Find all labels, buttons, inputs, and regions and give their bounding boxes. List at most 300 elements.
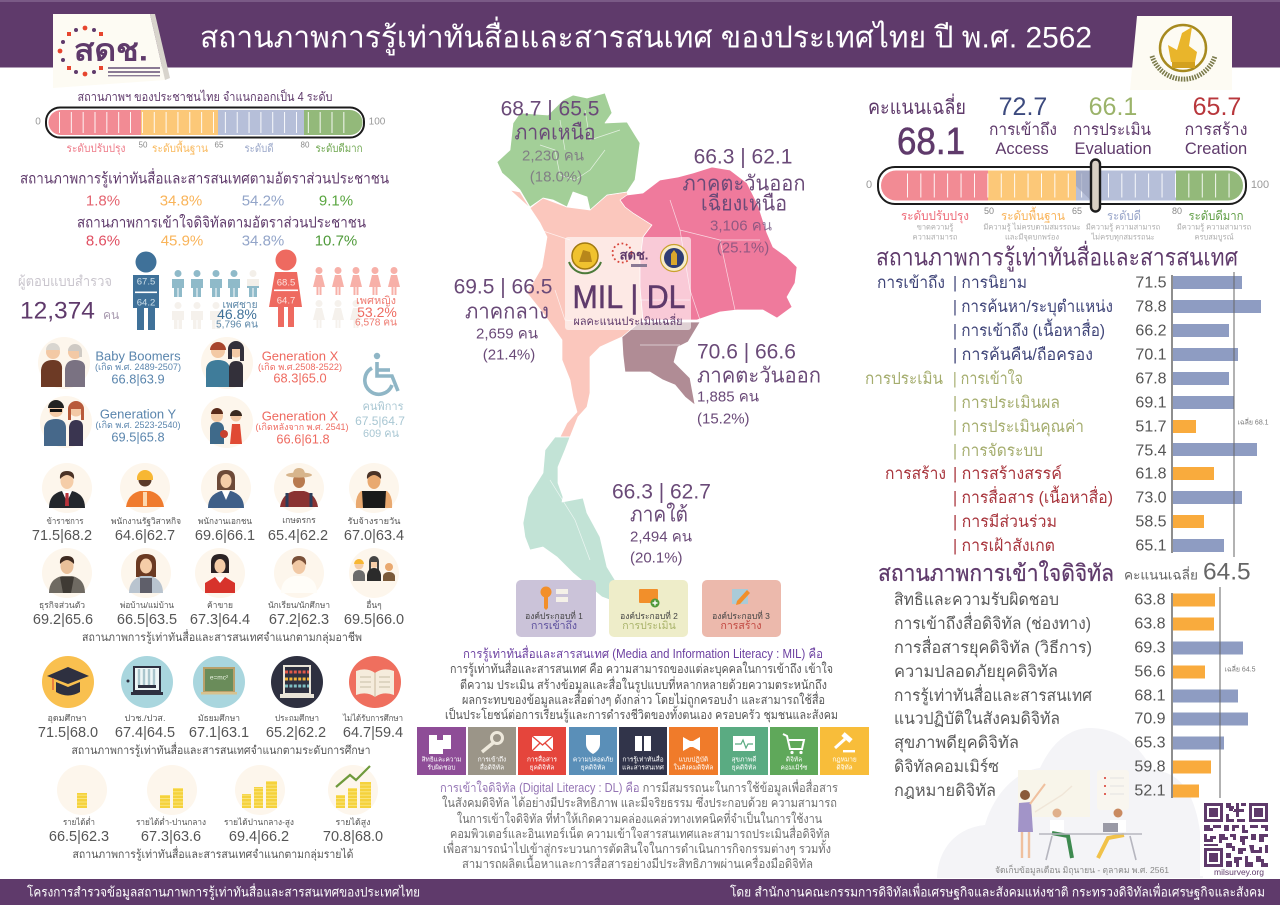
MIL definition: เป็นประโยชน์ต่อการเรียนรู้และการดำรงชีวิตของทั้งตนเอง ครอบครัว ชุมชนและสังคม <box>445 705 838 723</box>
MIL values: 71.5 <box>1135 274 1167 292</box>
occupation: state enterprise: พนักงานรัฐวิสาหกิจ <box>111 516 181 527</box>
education: primary <box>266 656 326 741</box>
panel: MIL bar chart <box>865 240 1269 557</box>
Generation text: 66.6|61.8 <box>276 432 330 446</box>
logo: ministry <box>1130 16 1232 90</box>
tile: communication: ยุคดิจิทัล <box>530 764 554 772</box>
occupation: student: นักเรียน/นักศึกษา <box>268 600 330 610</box>
panel: respondents: 12,374 <box>20 298 95 324</box>
panel: overall scale: 65 <box>1072 206 1082 216</box>
DL definition: ในสังคมดิจิทัล ได้อย่างมีประสิทธิภาพ และมีจริยธรรม ซึ่งประกอบด้วย ความสามารถ <box>442 794 837 810</box>
region label: east: (15.2%) <box>697 410 750 428</box>
education: secondary: e=mc² <box>210 674 229 682</box>
occupation: homemaker: 66.5|63.5 <box>117 612 177 628</box>
occupation caption: สถานภาพการรู้เท่าทันสื่อและสารสนเทศจำแนกตามกลุ่มอาชีพ <box>82 629 362 644</box>
panel: population shares: 54.2% <box>242 192 284 210</box>
occupation: business owner: 69.2|65.6 <box>33 612 93 628</box>
panel: overall scale <box>866 160 1269 242</box>
occupation: trader: ค้าขาย <box>207 600 233 610</box>
region label: north: 68.7 | 65.5 <box>501 98 599 120</box>
panel: overall scale: 80 <box>1172 206 1182 216</box>
panel: four level scale: 80 <box>301 140 310 150</box>
QR code <box>1200 798 1272 877</box>
scale marker <box>1091 160 1100 212</box>
scale heading: สถานภาพฯ ของประชาชนไทย จำแนกออกเป็น 4 ระดับ <box>78 89 333 104</box>
DL row labels: ดิจิทัลคอมเมิร์ซ <box>894 757 999 776</box>
occupation: homemaker: พ่อบ้าน/แม่บ้าน <box>120 600 174 610</box>
occupation: business owner: ธุรกิจส่วนตัว <box>39 600 85 611</box>
footer band <box>0 879 1280 905</box>
panel: overall scores: คะแนนเฉลี่ย <box>868 93 966 119</box>
icon: male figure <box>133 252 159 330</box>
region label: central: ภาคกลาง <box>465 300 549 324</box>
education: secondary: 67.1|63.1 <box>189 725 249 741</box>
panel: DL bar chart: คะแนนเฉลี่ย <box>1124 566 1198 582</box>
Generation X text: Generation X <box>262 348 339 364</box>
panel: overall scores <box>868 93 1248 163</box>
panel: MIL bar chart: เฉลี่ย 68.1 <box>1237 418 1269 426</box>
region label: south <box>612 480 711 566</box>
score: creation: Creation <box>1185 140 1247 158</box>
MIL values: 70.1 <box>1135 346 1167 364</box>
DL values: 65.3 <box>1134 734 1166 752</box>
Generation text <box>256 408 348 446</box>
MIL values: 73.0 <box>1135 490 1167 506</box>
card: access: องค์ประกอบที่ 1 <box>525 610 583 621</box>
panel: respondents <box>18 250 400 330</box>
region label: central: (21.4%) <box>483 346 535 364</box>
panel: overall scale: 0 <box>866 179 872 191</box>
occupation: private employee <box>195 463 255 544</box>
disabled text: คนพิการ <box>362 401 404 413</box>
occupation: trader: 67.3|64.4 <box>190 612 250 628</box>
score: evaluation: 66.1 <box>1089 93 1137 121</box>
DL bars <box>1172 587 1248 800</box>
map centre badge: MIL | DL <box>572 279 686 315</box>
map centre badge <box>565 237 691 330</box>
panel: four level scale: 65 <box>215 140 224 150</box>
occupation: homemaker <box>117 548 177 628</box>
panel: overall scale: ระดับพื้นฐาน <box>1001 206 1065 223</box>
score: access: การเข้าถึง <box>989 121 1057 139</box>
tile: communication <box>518 727 566 775</box>
region label: north-east: 3,106 คน <box>710 218 772 234</box>
occupation: trader <box>190 548 250 628</box>
income: low: 66.5|62.3 <box>49 829 109 845</box>
region label: south: 66.3 | 62.7 <box>612 480 711 504</box>
score: evaluation <box>1073 93 1152 158</box>
occupation: others <box>344 548 404 628</box>
Generation Y text: 69.5|65.8 <box>111 430 165 444</box>
score: access: Access <box>995 140 1049 158</box>
panel: income <box>49 765 383 861</box>
DL topic tiles <box>417 727 869 775</box>
panel: overall scale: ครบสมบูรณ์ <box>1194 232 1234 242</box>
icon: male figure: 64.2 <box>137 298 155 308</box>
footer left text: โครงการสำรวจข้อมูลสถานภาพการรู้เท่าทันสื่อและสารสนเทศของประเทศไทย <box>27 884 420 900</box>
education: vocational: 67.4|64.5 <box>115 725 175 741</box>
title: สถานภาพการรู้เท่าทันสื่อและสารสนเทศ ของประเทศไทย ปี พ.ศ. 2562 <box>200 16 1092 56</box>
MIL values: 75.4 <box>1135 442 1167 460</box>
region label: east: 70.6 | 66.6 <box>697 340 796 364</box>
MIL bars <box>1172 272 1261 557</box>
header band <box>0 0 1280 68</box>
panel: overall scale: ขาดความรู้ <box>917 222 953 232</box>
MIL row labels: | การประเมินคุณค่า <box>953 418 1084 437</box>
data collection note: จัดเก็บข้อมูลเดือน มิถุนายน - ตุลาคม พ.ศ. 2561 <box>995 864 1169 876</box>
icon: generation X <box>201 337 253 389</box>
DL values: 63.8 <box>1134 592 1166 608</box>
income: middle-high: 69.4|66.2 <box>229 829 289 845</box>
education: primary: ประถมศึกษา <box>275 713 319 723</box>
MIL definition <box>445 645 838 723</box>
occupation: government officer <box>32 463 92 544</box>
tile: safety <box>569 727 617 775</box>
DL values: 56.6 <box>1134 664 1166 680</box>
DL row labels: สิทธิและความรับผิดชอบ <box>894 591 1059 609</box>
Baby Boomers text: (เกิด พ.ศ. 2489-2507) <box>95 362 181 372</box>
region label: central: 2,659 คน <box>476 326 538 342</box>
MIL group labels <box>865 274 946 483</box>
education: higher <box>38 656 98 741</box>
logo: ONDE: สดช. <box>74 34 148 68</box>
DL definition: เพื่อสามารถนำไปเข้าสู่กระบวนการตัดสินใจในการดำเนินการกิจกรรมต่างๆ รวมทั้ง <box>443 839 831 857</box>
card: creation <box>702 580 781 637</box>
panel: overall scale: 50 <box>984 206 994 216</box>
score: creation: 65.7 <box>1193 93 1241 121</box>
tile: law <box>820 727 869 775</box>
region label: north-east: 66.3 | 62.1 <box>694 146 792 168</box>
card: creation: การสร้าง <box>721 620 761 632</box>
MIL chart heading: สถานภาพการรู้เท่าทันสื่อและสารสนเทศ <box>876 240 1238 272</box>
Generation Y text: Generation Y <box>100 406 177 422</box>
Baby Boomers text: 66.8|63.9 <box>111 372 165 386</box>
region label: south: (20.1%) <box>630 550 683 566</box>
education: secondary <box>189 656 249 741</box>
tile: access <box>468 727 516 775</box>
education: none: 64.7|59.4 <box>343 725 403 741</box>
education: primary: 65.2|62.2 <box>266 725 326 741</box>
map of Thailand <box>497 93 797 600</box>
income: high: รายได้สูง <box>336 817 370 828</box>
region label: north-east: ภาคตะวันออก <box>682 172 806 196</box>
MIL group labels: การสร้าง <box>885 465 946 483</box>
occupation: daily worker <box>344 463 404 544</box>
panel: population shares <box>20 168 389 250</box>
DL definition: สามารถผลิตเนื้อหาและการสื่อสารอย่างมีประสิทธิภาพผ่านเครื่องมือดิจิทัล <box>462 854 813 871</box>
tile: access: การเข้าถึง <box>478 756 506 764</box>
MIL share heading: สถานภาพการรู้เท่าทันสื่อและสารสนเทศตามอัตราส่วนประชาชน <box>20 168 389 188</box>
male ratio pictogram <box>172 270 259 329</box>
MIL definition: การรู้เท่าทันสื่อและสารสนเทศ (Media and Information Literacy : MIL) คือ <box>463 645 823 662</box>
badge logos: สดช. <box>620 248 648 262</box>
panel: population shares: 10.7% <box>315 232 357 250</box>
education: vocational: ปวช./ปวส. <box>124 713 166 723</box>
DL row labels <box>894 591 1092 800</box>
male share: 46.8% <box>217 306 257 322</box>
panel: four level scale: ระดับดีมาก <box>316 142 362 155</box>
panel: four level scale: 100 <box>369 116 386 128</box>
DL row labels: ความปลอดภัยยุคดิจิทัล <box>894 663 1058 682</box>
region: north <box>497 93 640 210</box>
MIL values: 65.1 <box>1135 538 1167 554</box>
panel: DL bar chart: เฉลี่ย 64.5 <box>1224 664 1256 674</box>
occupation: farmer: เกษตรกร <box>282 515 316 525</box>
tile: literacy: และสารสนเทศ <box>622 764 665 772</box>
DL row labels: สุขภาพดียุคดิจิทัล <box>894 734 1019 753</box>
income: low-middle: 67.3|63.6 <box>141 829 201 845</box>
map centre badge: ผลคะแนนประเมินเฉลี่ย <box>574 313 682 328</box>
region label: south: ภาคใต้ <box>630 502 688 526</box>
region: central <box>510 190 652 437</box>
DL definition: ในการเข้าใจดิจิทัล ที่ทำให้เกิดความคล่องแคล่วทางเทคนิคที่จำเป็นในการใช้งาน <box>457 810 822 826</box>
tile: rights <box>417 727 466 775</box>
panel: population shares: 8.6% <box>86 232 120 250</box>
icon: female figure: 68.5 <box>277 278 295 288</box>
Generation text: Generation X <box>262 408 339 424</box>
male share <box>216 299 258 330</box>
tile: literacy: การรู้เท่าทันสื่อ <box>622 754 664 764</box>
Generation X text <box>258 348 342 386</box>
panel: four level scale: ระดับพื้นฐาน <box>152 140 208 155</box>
MIL row labels: | การเข้าถึง (เนื้อหาสื่อ) <box>953 318 1105 340</box>
scale bar <box>46 108 364 138</box>
tile: health <box>720 727 768 775</box>
tile: etiquette <box>669 727 718 775</box>
tile: health: สุขภาพดี <box>732 756 756 764</box>
panel: overall scale: มีความรู้ ความสามารถ <box>1177 222 1251 232</box>
female share: 6,578 คน <box>355 318 397 328</box>
region label: south: 2,494 คน <box>630 528 692 546</box>
Generation text: (เกิดหลังจาก พ.ศ. 2541) <box>256 422 348 432</box>
DL row labels: แนวปฏิบัติในสังคมดิจิทัล <box>894 709 1060 728</box>
MIL group labels: การเข้าถึง <box>877 274 945 292</box>
occupation: state enterprise: 64.6|62.7 <box>115 528 175 544</box>
region label: central: 69.5 | 66.5 <box>454 276 552 298</box>
panel: four level scale: 50 <box>139 140 148 150</box>
occupation: daily worker: รับจ้างรายวัน <box>348 516 401 526</box>
Generation Y text: (เกิด พ.ศ. 2523-2540) <box>96 420 180 430</box>
occupation: government officer: ข้าราชการ <box>46 516 84 526</box>
panel: overall scores: 68.1 <box>897 121 965 163</box>
icon: baby boomers <box>38 337 90 389</box>
panel: overall scale: มีความรู้ ไม่ครบตามสมรรถนะ <box>983 222 1081 232</box>
DL definition <box>440 779 838 871</box>
income: high: 70.8|68.0 <box>323 829 383 845</box>
DL values: 70.9 <box>1134 710 1166 728</box>
occupation: private employee: 69.6|66.1 <box>195 528 255 544</box>
panel: component cards <box>516 580 781 637</box>
occupation: business owner <box>33 548 93 628</box>
income: low: รายได้ต่ำ <box>63 816 95 827</box>
panel: population shares: 45.9% <box>161 232 203 250</box>
tile: health: ยุคดิจิทัล <box>732 764 756 772</box>
region label: east: 1,885 คน <box>697 388 759 406</box>
Generation Y text <box>96 406 180 444</box>
icon: generation Y <box>40 396 92 448</box>
region label: north-east <box>682 146 806 256</box>
tile: etiquette: แบบปฏิบัติ <box>679 756 708 764</box>
panel: respondents: คน <box>103 308 119 322</box>
card: creation: องค์ประกอบที่ 3 <box>712 610 770 621</box>
occupation: others: อื่นๆ <box>366 599 382 610</box>
tile: communication: การสื่อสาร <box>527 754 558 764</box>
MIL values: 66.2 <box>1135 322 1167 340</box>
icon: wheelchair <box>365 353 398 394</box>
region label: north: (18.0%) <box>530 168 582 186</box>
panel: overall scale: ระดับดี <box>1107 209 1141 223</box>
region label: north: ภาคเหนือ <box>514 122 596 144</box>
MIL values: 51.7 <box>1135 418 1167 436</box>
occupation: student: 67.2|62.3 <box>269 612 329 628</box>
MIL values: 58.5 <box>1135 514 1167 530</box>
panel: population shares: 9.1% <box>319 192 353 210</box>
tile: law: กฎหมาย <box>832 756 857 764</box>
disabled text <box>355 401 405 440</box>
MIL row labels: | การประเมินผล <box>953 394 1060 412</box>
panel: overall scale: 100 <box>1251 179 1269 191</box>
DL share heading: สถานภาพการเข้าใจดิจิทัลตามอัตราส่วนประชาชน <box>77 214 366 232</box>
DL values: 52.1 <box>1134 782 1166 800</box>
region: east <box>622 322 700 405</box>
education: higher: อุดมศึกษา <box>48 713 86 724</box>
panel: four level scale: ระดับดี <box>244 142 274 155</box>
score: access: 72.7 <box>999 93 1047 121</box>
MIL row labels: | การสื่อสาร (เนื้อหาสื่อ) <box>953 485 1113 507</box>
MIL values: 61.8 <box>1135 466 1167 482</box>
panel: population shares: 34.8% <box>160 192 202 210</box>
icon: female figure <box>269 250 302 327</box>
income: middle-high <box>224 765 294 845</box>
panel: overall scale: มีความรู้ ความสามารถ <box>1086 222 1160 232</box>
disabled text: 67.5|64.7 <box>355 414 405 428</box>
female share: 53.2% <box>357 304 397 320</box>
tile: literacy <box>619 727 667 775</box>
MIL values: 69.1 <box>1135 394 1167 412</box>
MIL row labels: | การค้นคืน/ถือครอง <box>953 346 1093 364</box>
male share: เพศชาย <box>222 299 258 311</box>
education caption: สถานภาพการรู้เท่าทันสื่อและสารสนเทศจำแนกตามระดับการศึกษา <box>72 742 370 757</box>
MIL row labels: | การนิยาม <box>953 274 1027 292</box>
Baby Boomers text: Baby Boomers <box>95 348 181 364</box>
panel: DL bar chart: 64.5 <box>1203 558 1251 586</box>
income caption: สถานภาพการรู้เท่าทันสื่อและสารสนเทศจำแนกตามกลุ่มรายได้ <box>72 846 354 861</box>
card: access <box>516 580 596 637</box>
MIL row labels: | การสร้างสรรค์ <box>953 464 1062 483</box>
score: creation: การสร้าง <box>1184 121 1248 139</box>
panel: overall scale: ความสามารถ <box>913 232 957 242</box>
income: low-middle: รายได้ต่ำ-ปานกลาง <box>136 816 206 827</box>
score: evaluation: Evaluation <box>1074 140 1152 158</box>
region: north-east <box>620 167 797 320</box>
DL values: 68.1 <box>1134 688 1166 704</box>
region label: east <box>697 340 821 428</box>
panel: four level scale: ระดับปรับปรุง <box>66 143 126 155</box>
icon: post 2541 generation <box>201 396 253 448</box>
tile: rights: สิทธิและความ <box>422 756 461 764</box>
occupation: farmer: 65.4|62.2 <box>268 528 328 544</box>
Generation X text: 68.3|65.0 <box>273 370 327 386</box>
MIL row labels: | การจัดระบบ <box>953 442 1043 460</box>
panel: four level scale <box>35 89 386 155</box>
education: none <box>342 656 403 741</box>
tile: commerce: ดิจิทัล <box>786 756 802 764</box>
respondents count: ผู้ตอบแบบสำรวจ <box>18 273 112 290</box>
tile: law: ดิจิทัล <box>836 764 853 772</box>
education: vocational <box>115 656 175 741</box>
MIL row labels: | การเข้าใจ <box>953 369 1023 388</box>
region: south <box>523 437 615 600</box>
score: creation <box>1184 93 1248 158</box>
MIL definition: ผลกระทบของข้อมูลและสื่อต่างๆ ดังกล่าว โดยไม่ถูกครอบงำ และสามารถใช้สื่อ <box>462 691 825 708</box>
DL definition: การเข้าใจดิจิทัล (Digital Literacy : DL) คือ การมีสมรรถนะในการใช้ข้อมูลเพื่อสื่อสาร <box>440 779 838 796</box>
income: high <box>323 765 383 845</box>
logo: ONDE <box>53 14 170 88</box>
MIL definition: การรู้เท่าทันสื่อและสารสนเทศ คือ ความสามารถของแต่ละบุคคลในการเข้าถึง เข้าใจ <box>450 660 833 677</box>
panel: population shares: 34.8% <box>242 232 284 250</box>
region label: north-east: (25.1%) <box>717 240 769 256</box>
occupation: daily worker: 67.0|63.4 <box>344 528 404 544</box>
illustration: team at whiteboard <box>937 728 1203 878</box>
panel: DL bar chart <box>878 558 1256 800</box>
panel: education <box>38 656 403 757</box>
education: none: ไม่ได้รับการศึกษา <box>342 713 403 723</box>
income: low-middle <box>136 765 206 845</box>
education: higher: 71.5|68.0 <box>38 725 98 741</box>
female ratio pictogram <box>313 267 400 328</box>
region label: north <box>501 98 599 186</box>
education: secondary: มัธยมศึกษา <box>198 713 240 723</box>
female share: เพศหญิง <box>356 295 396 307</box>
MIL values: 78.8 <box>1135 298 1167 316</box>
MIL row labels: | การค้นหา/ระบุตำแหน่ง <box>953 298 1113 317</box>
panel: population shares: 1.8% <box>86 192 120 210</box>
tile: safety: ความปลอดภัย <box>573 756 613 764</box>
occupation: others: 69.5|66.0 <box>344 612 404 628</box>
card: evaluation: องค์ประกอบที่ 2 <box>620 610 678 621</box>
region label: east: ภาคตะวันออก <box>697 364 821 388</box>
DL row labels: การรู้เท่าทันสื่อและสารสนเทศ <box>894 684 1092 706</box>
card: evaluation: การประเมิน <box>622 620 676 632</box>
region label: central <box>454 276 552 364</box>
DL chart heading: สถานภาพการเข้าใจดิจิทัล <box>878 560 1114 586</box>
panel: generations <box>38 337 405 448</box>
panel: overall scale: ระดับปรับปรุง <box>901 209 969 224</box>
DL row labels: การเข้าถึงสื่อดิจิทัล (ช่องทาง) <box>894 612 1091 633</box>
tile: rights: รับผิดชอบ <box>427 764 456 772</box>
panel: overall scale: และมีจุดบกพร่อง <box>1005 232 1059 242</box>
tile: commerce: คอมเมิร์ซ <box>781 764 808 772</box>
tile: safety: ยุคดิจิทัล <box>581 764 605 772</box>
region label: north-east: เฉียงเหนือ <box>701 192 787 216</box>
panel: overall scale: ไม่ครบทุกสมรรถนะ <box>1090 232 1155 242</box>
DL values <box>1134 592 1166 800</box>
male share: 5,796 คน <box>216 320 258 330</box>
income: middle-high: รายได้ปานกลาง-สูง <box>224 817 294 828</box>
card: evaluation <box>609 580 688 637</box>
occupation: private employee: พนักงานเอกชน <box>198 516 252 526</box>
panel: overall scale: ระดับดีมาก <box>1188 209 1244 223</box>
card: access: การเข้าถึง <box>531 620 577 632</box>
MIL row labels: | การมีส่วนร่วม <box>953 513 1057 531</box>
region label: north: 2,230 คน <box>522 148 584 164</box>
MIL row labels <box>953 274 1113 555</box>
DL values: 63.8 <box>1134 616 1166 632</box>
DL values: 59.8 <box>1134 758 1166 776</box>
MIL row labels: | การเฝ้าสังเกต <box>953 537 1055 555</box>
tile: etiquette: ในสังคมดิจิทัล <box>674 764 713 772</box>
panel: occupations <box>32 463 404 644</box>
